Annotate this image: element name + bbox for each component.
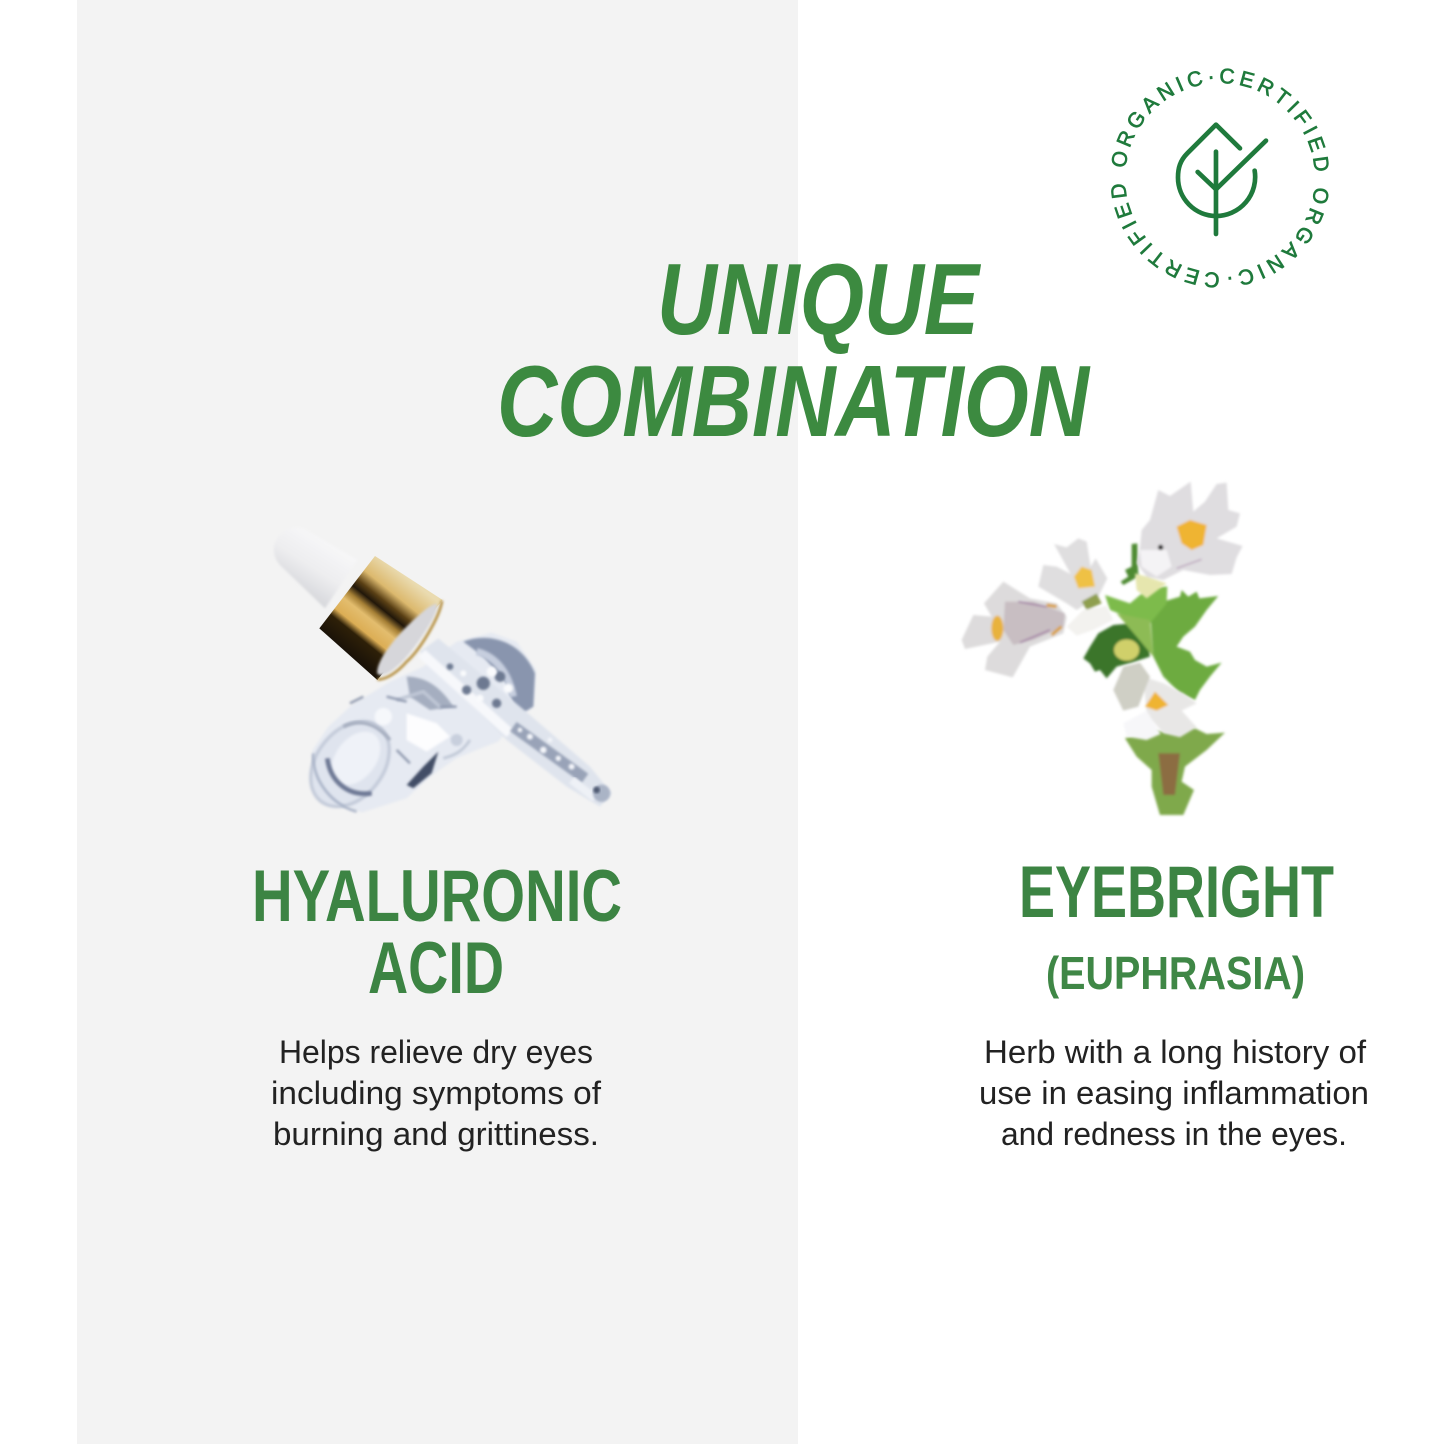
lower leaves and stem [1083, 543, 1225, 815]
left description: including symptoms of [271, 1075, 601, 1111]
pipette bubbles [518, 728, 575, 770]
panel: left grey background [77, 0, 798, 1444]
left ingredient heading: ACID [368, 928, 504, 1009]
image: eyebright flower [962, 482, 1243, 815]
second flower [1038, 538, 1113, 636]
left flower [962, 582, 1067, 677]
left ingredient heading [252, 856, 622, 1009]
title: unique combination: UNIQUE [657, 244, 981, 356]
gold collar [319, 556, 443, 680]
right ingredient heading: EYEBRIGHT [1019, 852, 1334, 933]
title: unique combination [497, 244, 1091, 458]
collar opening [377, 604, 437, 675]
left description [271, 1034, 601, 1152]
right description: and redness in the eyes. [1001, 1116, 1347, 1152]
right ingredient heading [1019, 852, 1334, 999]
right description [979, 1034, 1369, 1152]
left ingredient heading: HYALURONIC [252, 856, 622, 937]
top flower [1135, 482, 1243, 598]
image: hyaluronic acid dropper and glass bottle [274, 527, 612, 822]
left description: Helps relieve dry eyes [279, 1034, 593, 1070]
bottle [295, 633, 536, 822]
base of bottle [463, 638, 535, 717]
lower flower [1113, 663, 1197, 740]
right description: Herb with a long history of [984, 1034, 1366, 1070]
icon: leaf with check mark [1178, 125, 1266, 234]
badge: certified organic seal [1111, 68, 1329, 288]
right description: use in easing inflammation [979, 1075, 1369, 1111]
rubber bulb [274, 527, 357, 608]
badge circular text: CERTIFIED ORGANIC·CERTIFIED ORGANIC· [1111, 68, 1329, 288]
pipette [420, 638, 612, 807]
title: unique combination: COMBINATION [497, 346, 1091, 458]
right ingredient heading: (EUPHRASIA) [1046, 947, 1305, 999]
left description: burning and grittiness. [273, 1116, 599, 1152]
